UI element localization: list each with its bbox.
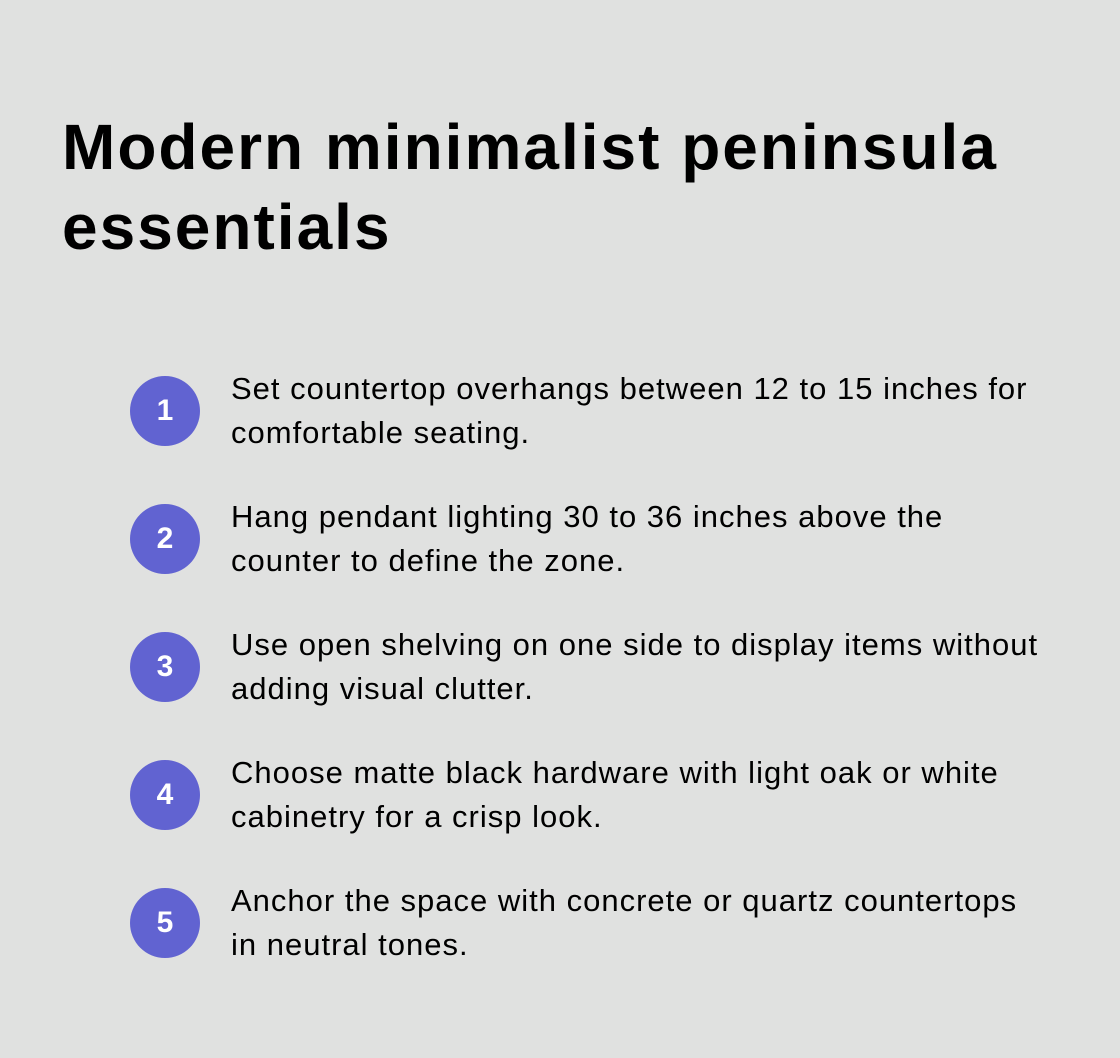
item 2: counter to define the zone. <box>231 543 625 578</box>
item 4: Choose matte black hardware with light oak or white <box>231 755 999 790</box>
item 2: Hang pendant lighting 30 to 36 inches above the <box>231 499 943 534</box>
item 2 <box>130 499 943 578</box>
item 4: 4 <box>157 778 173 811</box>
item 1 <box>130 371 1028 450</box>
item 1: comfortable seating. <box>231 415 530 450</box>
item 1: Set countertop overhangs between 12 to 15 inches for <box>231 371 1028 406</box>
item 5: 5 <box>157 906 173 939</box>
item 4 <box>130 755 999 834</box>
item 5 <box>130 883 1017 962</box>
item 5: Anchor the space with concrete or quartz countertops <box>231 883 1017 918</box>
item 3: 3 <box>157 650 173 683</box>
item 5: in neutral tones. <box>231 927 469 962</box>
item 4: cabinetry for a crisp look. <box>231 799 603 834</box>
title: Modern minimalist peninsula <box>62 111 998 183</box>
item 2: 2 <box>157 522 173 555</box>
item 3: adding visual clutter. <box>231 671 534 706</box>
item 3 <box>130 627 1038 706</box>
item 1: 1 <box>157 394 173 427</box>
title: essentials <box>62 191 392 263</box>
item 3: Use open shelving on one side to display items without <box>231 627 1038 662</box>
title <box>62 111 998 263</box>
